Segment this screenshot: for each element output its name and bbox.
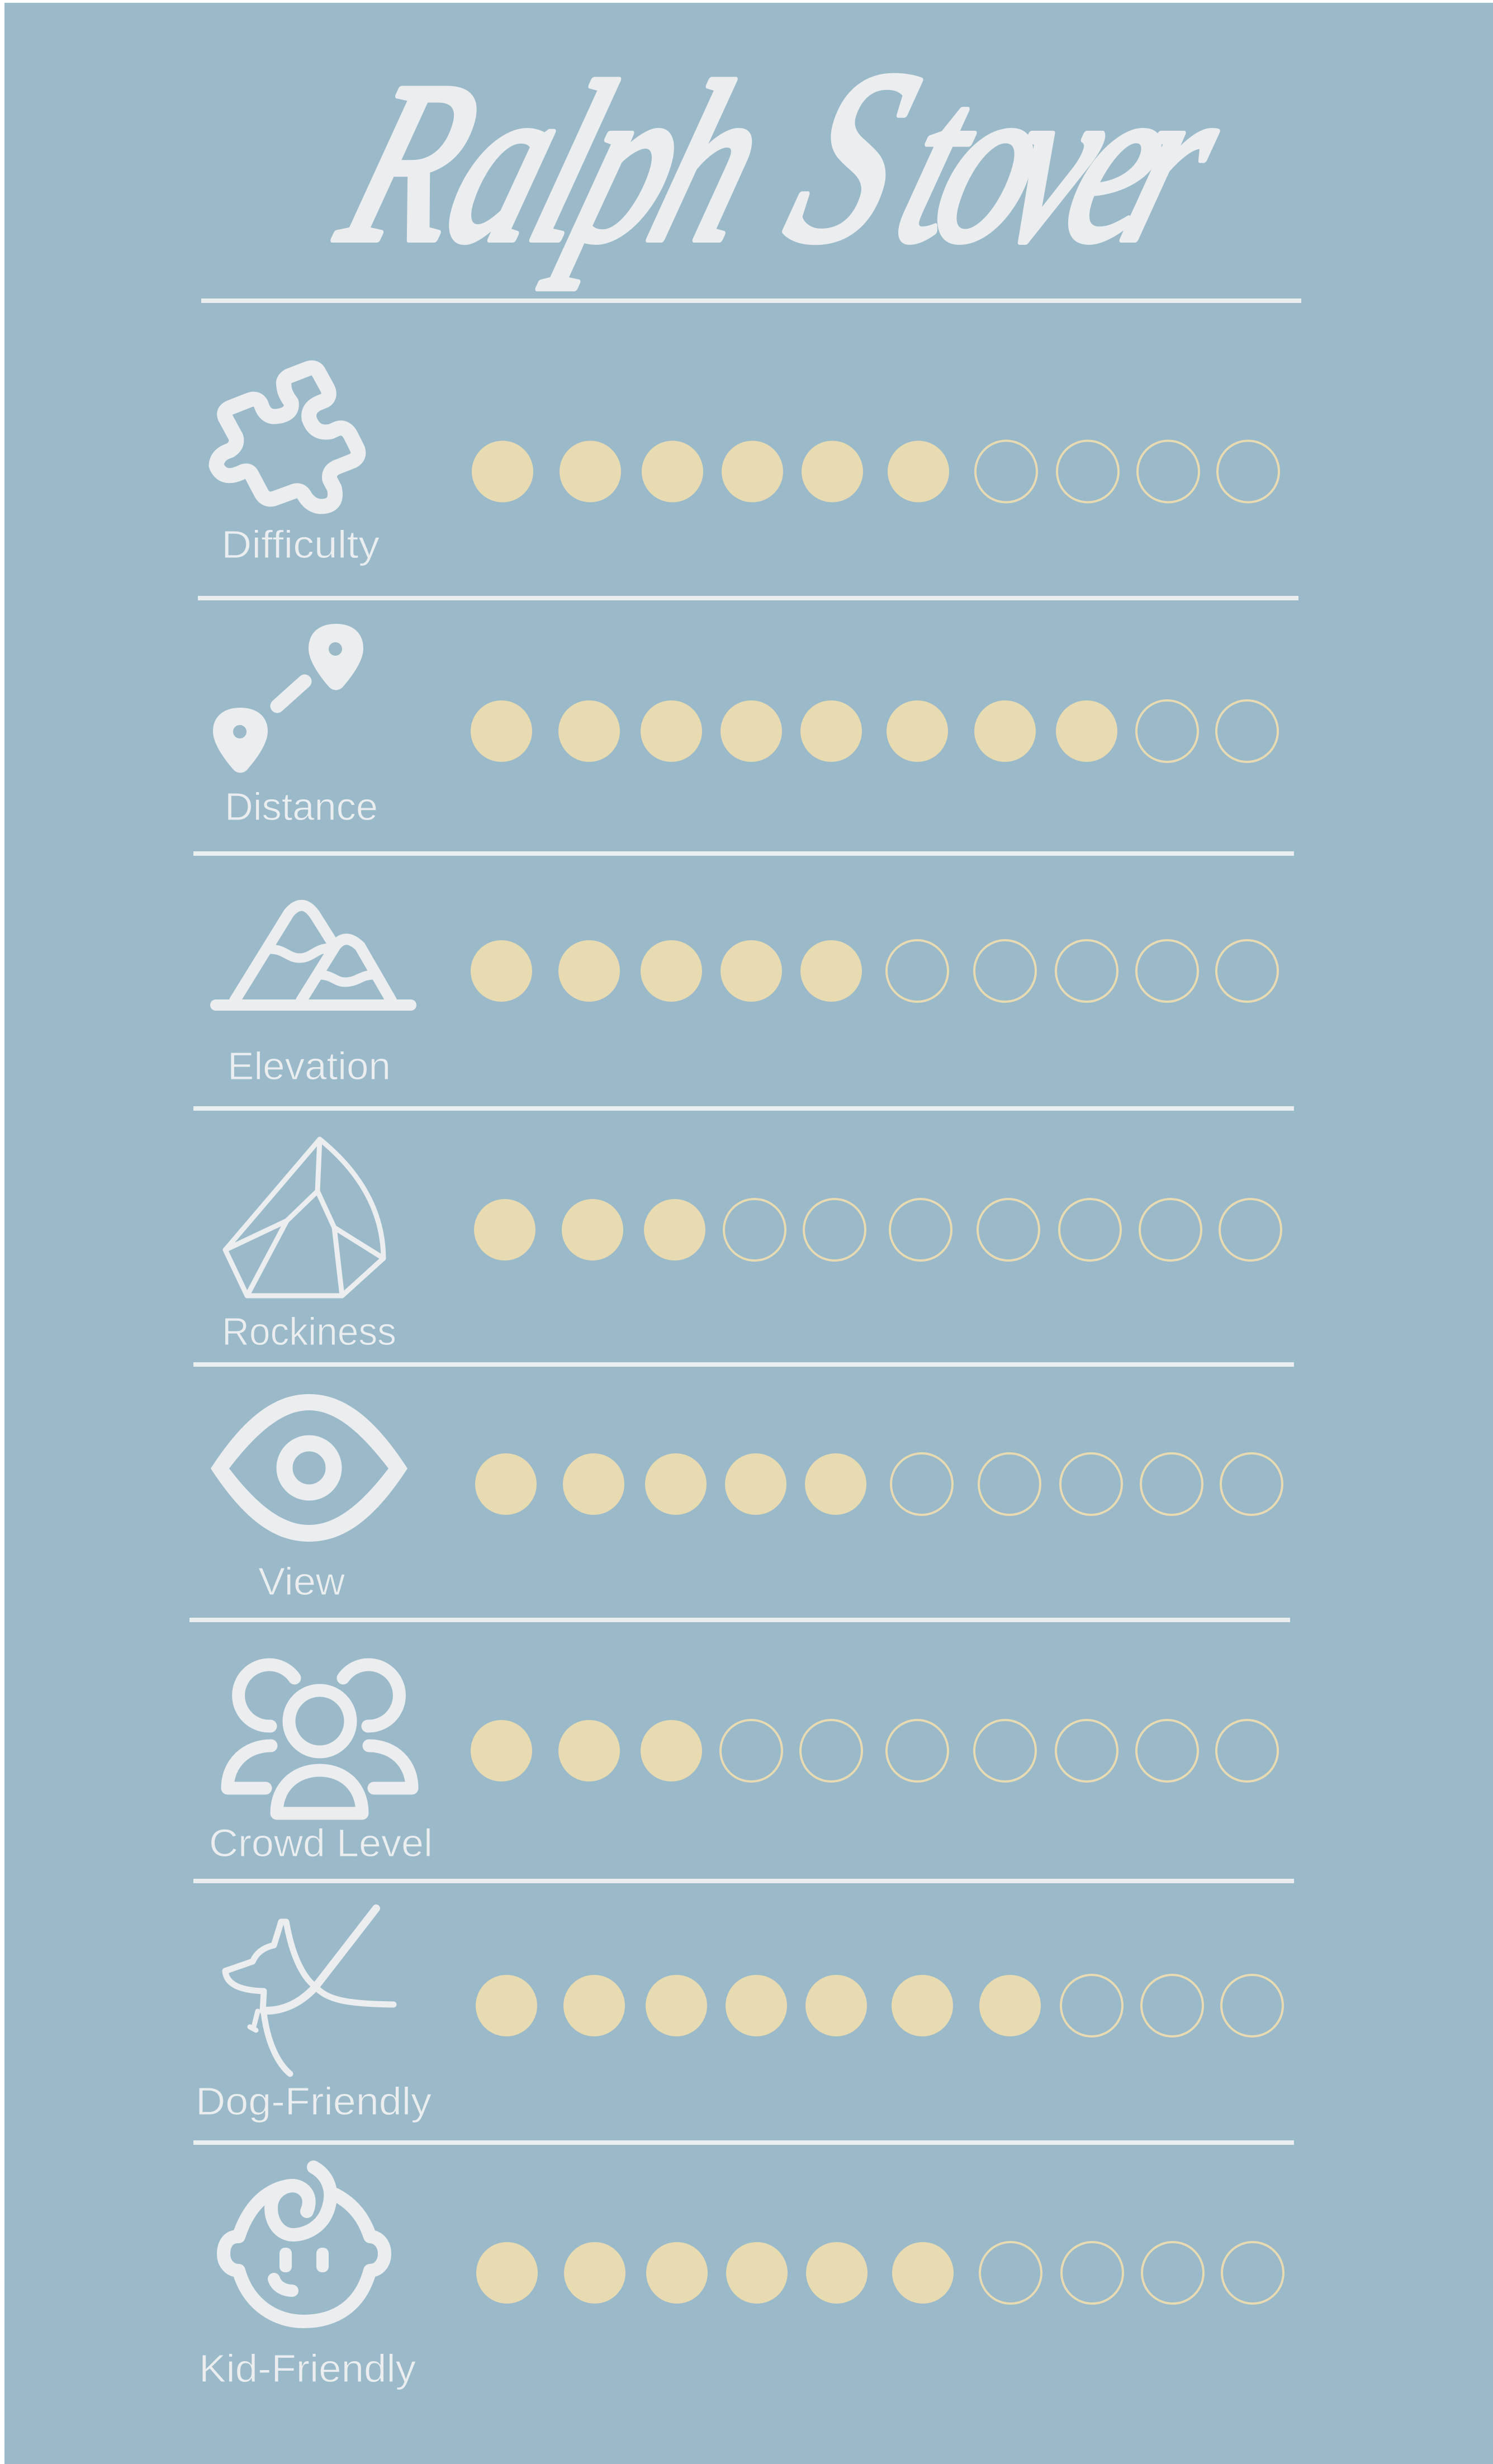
icon: eye (211, 1394, 407, 1542)
label: Distance: Distance (225, 785, 378, 828)
title: Ralph (315, 35, 795, 290)
rating: 3 of 10 (471, 1720, 1278, 1781)
icon: two map pins with dash (213, 624, 363, 773)
title (315, 20, 1256, 292)
label: Elevation: Elevation (227, 1044, 391, 1088)
rating: 6 of 10 (472, 440, 1279, 502)
row: Distance (213, 624, 1278, 828)
label: View: View (258, 1560, 345, 1603)
label: Rockiness: Rockiness (222, 1310, 396, 1353)
icon: faceted rock (225, 1139, 383, 1296)
icon: baby face (224, 2167, 385, 2321)
label: Difficulty: Difficulty (221, 523, 380, 566)
row: Dog-Friendly (196, 1908, 1283, 2123)
rating: 8 of 10 (471, 700, 1278, 762)
row: View (211, 1394, 1282, 1603)
rating: 3 of 10 (474, 1199, 1281, 1261)
label: Crowd Level: Crowd Level (209, 1821, 433, 1865)
icon: puzzle piece (216, 368, 358, 506)
rating: 5 of 10 (471, 940, 1278, 1002)
rating: 6 of 10 (476, 2242, 1283, 2304)
row: Elevation (216, 906, 1278, 1088)
icon: mountains (216, 906, 411, 1005)
title: Stover (762, 20, 1256, 292)
row: Kid-Friendly (199, 2167, 1283, 2390)
icon: dog on leash (225, 1908, 394, 2074)
rating: 7 of 10 (476, 1975, 1283, 2036)
label: Kid-Friendly: Kid-Friendly (199, 2347, 416, 2390)
rating: 5 of 10 (475, 1453, 1282, 1515)
row: Crowd Level (209, 1665, 1278, 1865)
label: Dog-Friendly: Dog-Friendly (196, 2079, 432, 2123)
row: Rockiness (222, 1139, 1281, 1353)
icon: group of people (227, 1665, 412, 1813)
row: Difficulty (216, 368, 1279, 566)
